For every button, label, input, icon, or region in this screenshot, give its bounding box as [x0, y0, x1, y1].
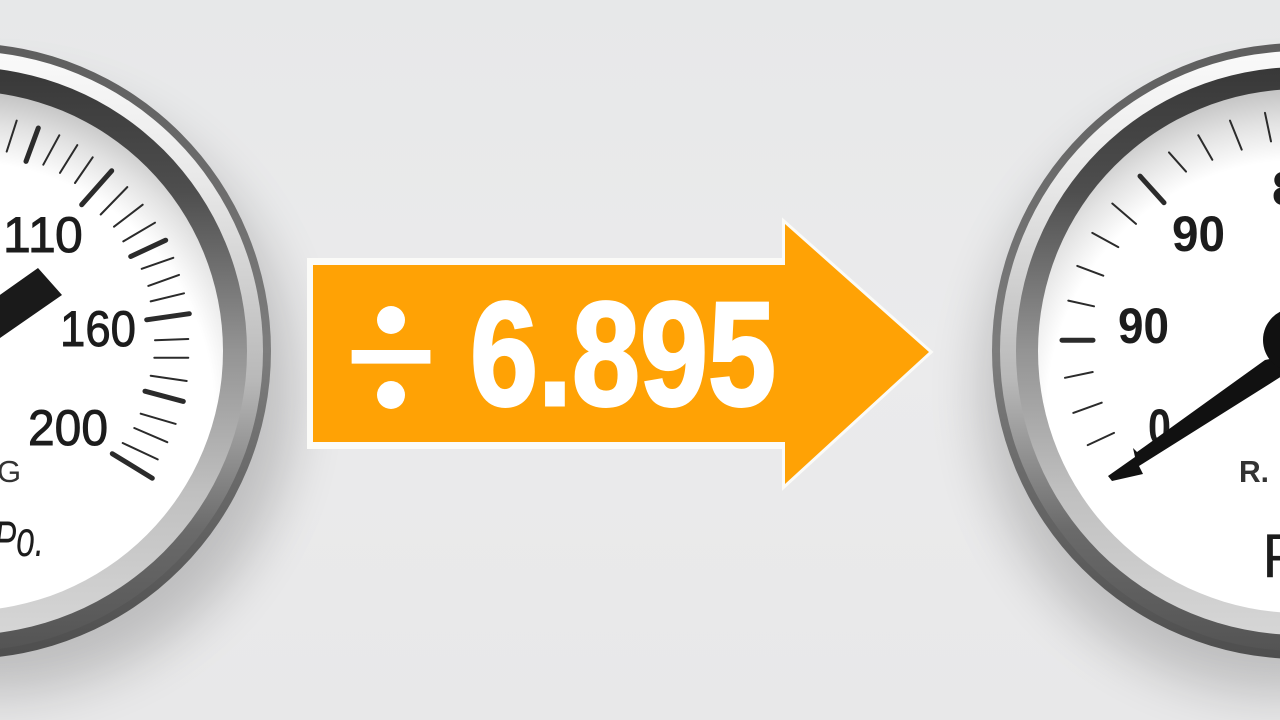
left gauge — [0, 43, 296, 694]
right gauge scale numbers: 90 — [1118, 298, 1169, 354]
conversion factor: 6.895 — [470, 272, 776, 437]
right gauge bezel — [992, 43, 1280, 659]
left gauge scale numbers: 160 — [60, 301, 136, 357]
right gauge shadow — [980, 86, 1280, 694]
right gauge small label: R. — [1239, 454, 1269, 489]
right gauge scale numbers: 0 — [1148, 399, 1171, 455]
left gauge needle — [0, 268, 62, 345]
right gauge needle — [1108, 308, 1280, 481]
left gauge scale numbers: 200 — [28, 400, 108, 456]
arrow shape — [313, 224, 929, 484]
conversion arrow — [307, 224, 929, 484]
arrow outline — [307, 224, 929, 484]
left gauge scale numbers — [3, 207, 136, 456]
division sign: ÷ — [346, 249, 436, 461]
right gauge — [980, 43, 1280, 694]
left gauge bezel — [0, 43, 271, 659]
left gauge scale numbers: 110 — [3, 207, 83, 263]
right gauge tick marks — [1062, 113, 1271, 445]
left gauge shadow — [0, 86, 296, 694]
right gauge scale numbers: 90 — [1172, 206, 1225, 262]
right gauge scale numbers — [1118, 163, 1280, 455]
left gauge tick marks — [7, 121, 189, 478]
